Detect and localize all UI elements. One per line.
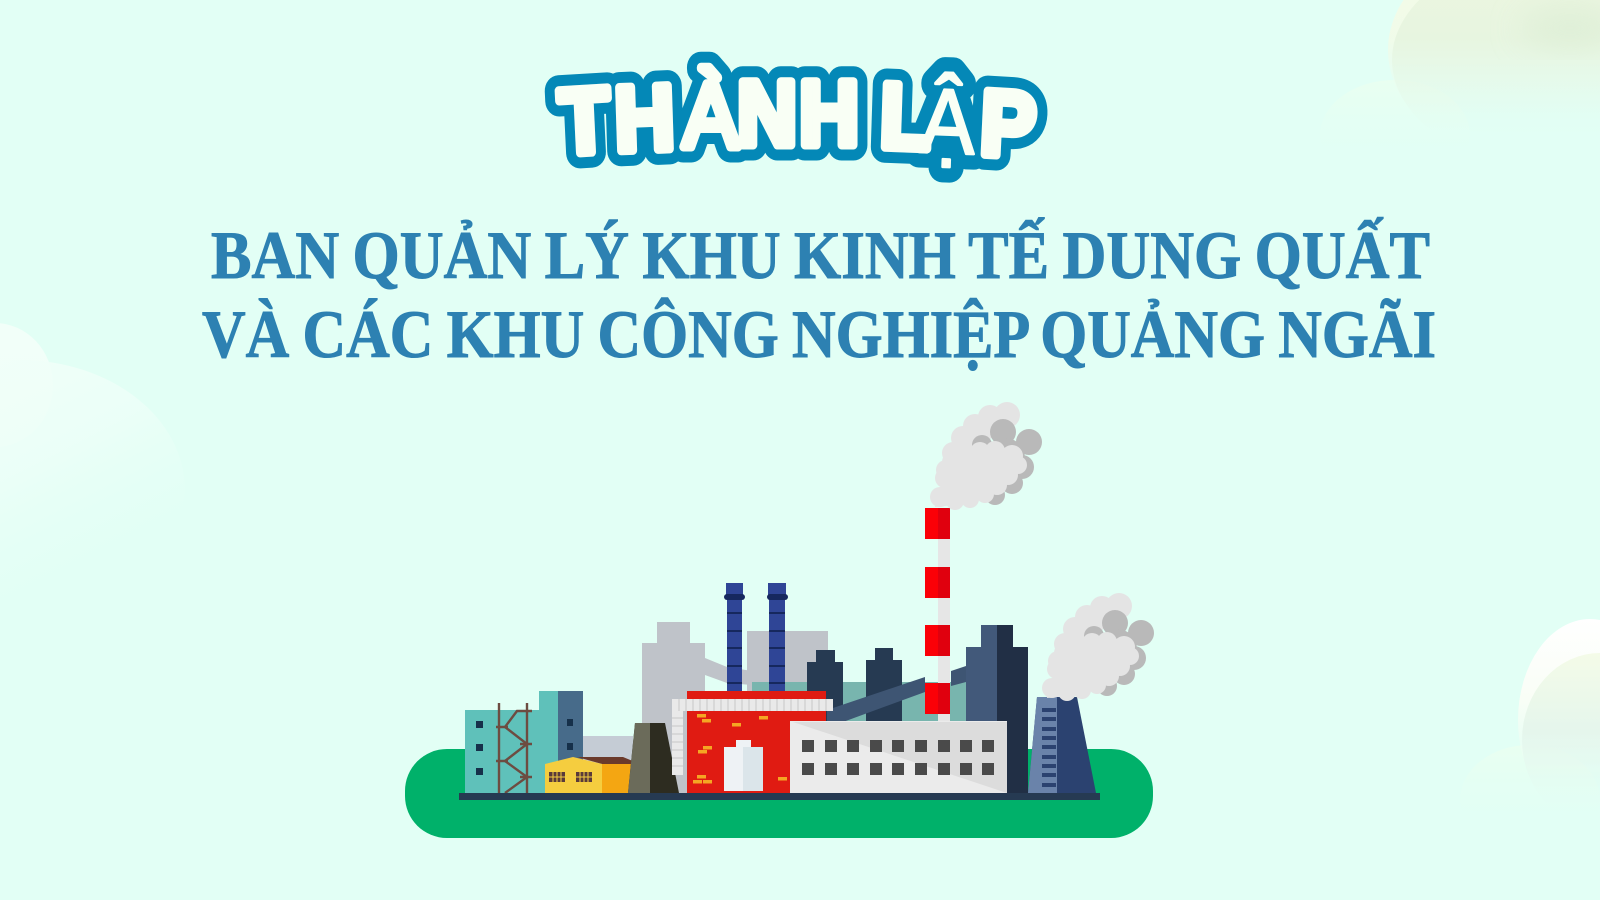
heading badge: THÀNH LẬP: N — [737, 62, 797, 165]
striped chimney — [925, 508, 950, 722]
red brick hall — [672, 691, 833, 793]
grey background buildings — [642, 622, 828, 793]
title: organisation name — [202, 217, 1436, 372]
door — [724, 740, 763, 791]
cloud: left — [0, 323, 185, 620]
green ground — [405, 749, 1153, 838]
title: organisation name: VÀ CÁC KHU CÔNG NGHIỆP QUẢNG NGÃI — [202, 296, 1436, 372]
blue cooling tower — [1028, 697, 1096, 793]
heading badge: THÀNH LẬP: H — [799, 62, 859, 165]
heading badge: THÀNH LẬP: P — [978, 71, 1038, 177]
title: organisation name: BAN QUẢN LÝ KHU KINH TẾ DUNG QUẤT — [211, 217, 1430, 293]
smoke: chimney — [930, 402, 1042, 510]
white factory hall — [790, 721, 1007, 793]
tall dark tower — [966, 625, 1028, 793]
ground bar — [459, 793, 1100, 800]
dark cooling tower — [628, 723, 679, 793]
heading badge: THÀNH LẬP: H — [613, 66, 676, 171]
conveyor belts — [827, 666, 966, 722]
teal block building — [465, 691, 633, 793]
scaffold — [496, 703, 532, 793]
teal band — [752, 682, 966, 722]
yellow house — [545, 757, 642, 793]
heading badge: THÀNH LẬP: L — [879, 64, 932, 169]
blue twin stacks — [724, 583, 788, 692]
heading badge: THÀNH LẬP: À — [683, 64, 739, 167]
dark towers — [807, 648, 902, 722]
heading badge: THÀNH LẬP — [557, 62, 1038, 177]
illustration: industrial complex — [405, 402, 1154, 838]
cloud: right — [1460, 619, 1600, 855]
heading badge: THÀNH LẬP: Ậ — [918, 69, 977, 174]
cloud: top right — [1320, 0, 1600, 190]
smoke: cooling tower — [1042, 593, 1154, 701]
heading badge: THÀNH LẬP: T — [557, 68, 612, 174]
bricks — [693, 714, 787, 784]
